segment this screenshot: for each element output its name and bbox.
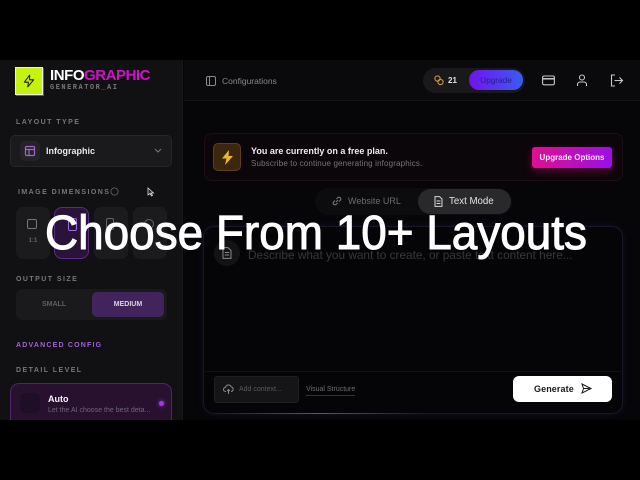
- icon: log out: [610, 74, 624, 86]
- label: detail level: DETAIL LEVEL: [16, 367, 83, 374]
- credits pill: [423, 68, 525, 93]
- button label: Generate: [534, 384, 574, 394]
- logo wordmark: INFOGRAPHIC: [50, 67, 150, 84]
- configurations link: Configurations: [222, 76, 277, 86]
- ratio icon 4: [144, 219, 154, 229]
- icon: card: [542, 76, 555, 86]
- bottom glow line: [214, 413, 424, 414]
- banner subtext: Subscribe to continue generating infographics.: [251, 159, 422, 168]
- detail level card: auto: [10, 383, 172, 433]
- card description: Let the AI choose the best deta...: [48, 407, 150, 414]
- prompt placeholder: Describe what you want to create, or paste text content here...: [248, 248, 573, 262]
- card title: Auto: [48, 394, 68, 404]
- label: output size: OUTPUT SIZE: [16, 276, 78, 283]
- option: medium: MEDIUM: [114, 301, 142, 308]
- selected dot: [159, 401, 164, 406]
- ratio card 3: [94, 207, 128, 259]
- ratio card selected: [54, 207, 89, 259]
- label: image dimensions: IMAGE DIMENSIONS: [18, 189, 110, 196]
- title overlay: Choose From 10+ Layouts: [45, 207, 587, 260]
- card icon: [20, 393, 40, 413]
- credit count: 21: [448, 76, 457, 85]
- output size toggle: [16, 289, 167, 320]
- app screenshot frame: [0, 60, 640, 420]
- icon: chevron: [154, 148, 162, 153]
- icon: upload cloud: [223, 384, 234, 394]
- ratio card 1:1: [16, 207, 50, 259]
- upgrade options button: [532, 147, 612, 168]
- tab: text mode active: [418, 189, 511, 214]
- dropdown value: Infographic: [46, 146, 95, 156]
- bottom divider: [205, 371, 621, 372]
- mode tabs: [315, 188, 512, 215]
- ratio icon: [27, 219, 37, 229]
- tab label: Text Mode: [449, 196, 494, 207]
- icon: user: [576, 74, 588, 86]
- icon: coins: [434, 75, 444, 86]
- ratio icon 3: [106, 218, 114, 230]
- visual structure link: Visual Structure: [306, 386, 355, 393]
- icon: document badge: [214, 240, 240, 266]
- ratio label: 1:1: [29, 238, 37, 244]
- panel: top bar: [184, 60, 640, 101]
- add context text: Add context...: [239, 386, 282, 393]
- option: medium: [92, 292, 164, 317]
- icon: document: [434, 196, 442, 207]
- upgrade button: [469, 70, 523, 90]
- upgrade button: Upgrade: [480, 75, 512, 85]
- logo subtitle: GENERATOR_AI: [50, 84, 118, 92]
- layout type dropdown: [10, 135, 172, 167]
- icon: link: [332, 196, 342, 206]
- panel: sidebar: [0, 60, 183, 420]
- banner heading: You are currently on a free plan.: [251, 146, 388, 156]
- add context field: [214, 376, 299, 403]
- visual structure link: [306, 385, 355, 396]
- generate button: [513, 376, 612, 402]
- icon: help: [110, 188, 118, 196]
- panel: free plan banner: [204, 133, 623, 181]
- logo icon: [15, 67, 43, 95]
- ratio card 4: [133, 207, 167, 259]
- ratio icon selected: [68, 218, 77, 231]
- icon: cursor: [148, 187, 154, 196]
- option: small: SMALL: [42, 301, 66, 308]
- icon: panel toggle: [206, 76, 216, 86]
- divider label: layout type: LAYOUT TYPE: [16, 119, 80, 126]
- icon: layout: [20, 141, 40, 161]
- icon: send: [581, 383, 592, 394]
- upgrade options button: Upgrade Options: [540, 153, 604, 162]
- icon: bolt badge: [213, 143, 241, 171]
- tab: website url: Website URL: [348, 196, 401, 206]
- panel: prompt input: [203, 226, 623, 414]
- heading: advanced config: ADVANCED CONFIG: [16, 342, 102, 349]
